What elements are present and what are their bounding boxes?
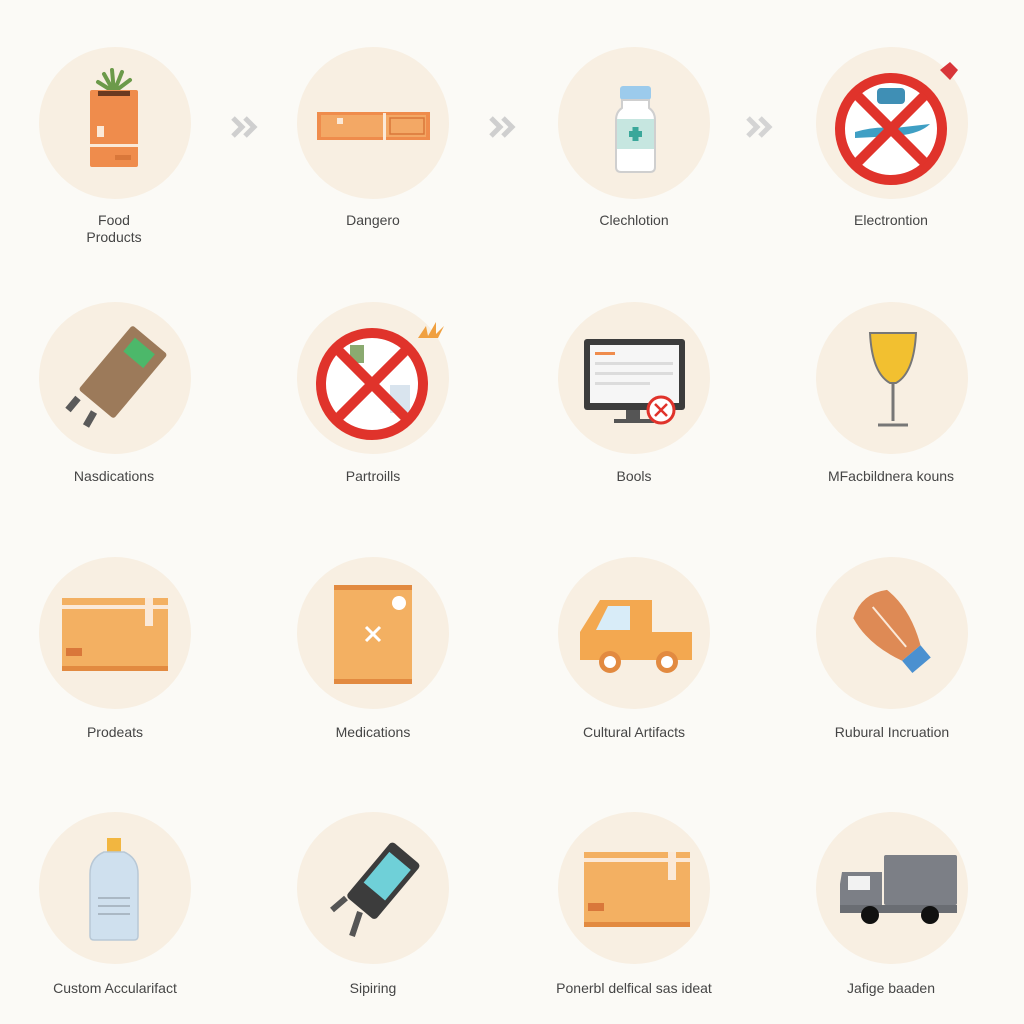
label: rubural incruation: Rubural Incruation: [835, 724, 949, 740]
panel: food products: [39, 47, 191, 228]
label: food products: Food: [98, 212, 130, 228]
panel: sipiring: [297, 812, 449, 996]
icon: box: [62, 598, 168, 671]
panel: ponerbl delfical sas ideat: [556, 812, 712, 996]
panel: prodeats: [39, 557, 191, 740]
icon: medicine bottle: [616, 86, 655, 172]
label: cultural artifacts: Cultural Artifacts: [583, 724, 685, 740]
panel: clechlotion: [558, 47, 710, 228]
icon: tilted device: [68, 325, 168, 426]
panel: jafige baaden: [816, 812, 968, 996]
arrow 2: [491, 118, 512, 136]
panel: medications: [297, 557, 449, 740]
arrow 1: [233, 118, 254, 136]
text: Products: [86, 229, 142, 245]
label: nasdications: Nasdications: [74, 468, 154, 484]
label: mfacbildnera kouns: MFacbildnera kouns: [828, 468, 954, 484]
panel: dangero: [297, 47, 449, 228]
icon: food box with plant: [90, 70, 138, 167]
label: jafige baaden: Jafige baaden: [847, 980, 935, 996]
label: electrontion: Electrontion: [854, 212, 928, 228]
label: dangero: Dangero: [346, 212, 400, 228]
panel: partroills: [297, 302, 449, 484]
panel: custom accularifact: [39, 812, 191, 996]
label: bools: Bools: [616, 468, 652, 484]
label: prodeats: Prodeats: [87, 724, 143, 740]
icon: long box: [317, 112, 430, 140]
label: clechlotion: Clechlotion: [599, 212, 669, 228]
arrow 3: [748, 118, 769, 136]
icon: tilted phone: [332, 841, 421, 936]
icon: goblet: [870, 333, 916, 425]
icon: plastic bottle: [90, 838, 138, 940]
label: ponerbl delfical sas ideat: Ponerbl delfical sas ideat: [556, 980, 712, 996]
panel: cultural artifacts: [558, 557, 710, 740]
icon: pickup truck: [580, 600, 692, 673]
label: custom accularifact: Custom Accularifact: [53, 980, 177, 996]
label: medications: Medications: [336, 724, 410, 740]
icon: bulb: [848, 583, 940, 680]
icon: prohibited items: [321, 322, 444, 435]
panel: mfacbildnera kouns: [816, 302, 968, 484]
panel: nasdications: [39, 302, 191, 484]
panel: electrontion: [816, 47, 968, 228]
label: partroills: Partroills: [346, 468, 400, 484]
icon: prohibited electronics: [839, 62, 958, 181]
icon: monitor: [584, 339, 685, 423]
icon: box: [584, 852, 690, 927]
icon: medication box: [334, 585, 412, 684]
panel: bools: [558, 302, 710, 484]
icon: truck: [840, 855, 957, 924]
label: sipiring: Sipiring: [350, 980, 396, 996]
panel: rubural incruation: [816, 557, 968, 740]
